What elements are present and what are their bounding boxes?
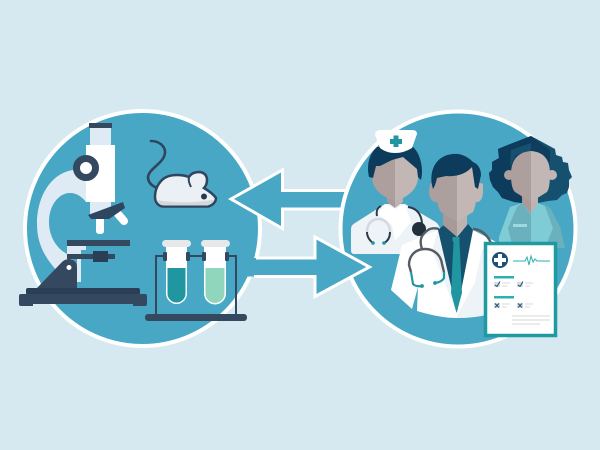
icon: microscope (19, 123, 147, 306)
notes lines (512, 316, 550, 324)
icon: medical cross badge (492, 252, 508, 268)
clipboard: medical chart (486, 244, 556, 336)
chart line: heartbeat (513, 256, 550, 265)
checklist section two (494, 296, 533, 308)
checklist section one (494, 276, 533, 287)
figure: doctor (391, 154, 500, 318)
icon: test tube rack (145, 240, 247, 321)
test tube: teal (162, 240, 191, 304)
arrow: pointing left toward laboratory (231, 170, 350, 228)
panel: right clinical circle (340, 112, 576, 346)
test tube: mint (201, 240, 230, 305)
figure: nurse (351, 130, 440, 254)
figure: woman clinician (489, 136, 572, 248)
icon: mouse (148, 141, 216, 206)
arrow: pointing right toward clinic (245, 237, 370, 296)
panel: left laboratory circle (25, 111, 260, 346)
